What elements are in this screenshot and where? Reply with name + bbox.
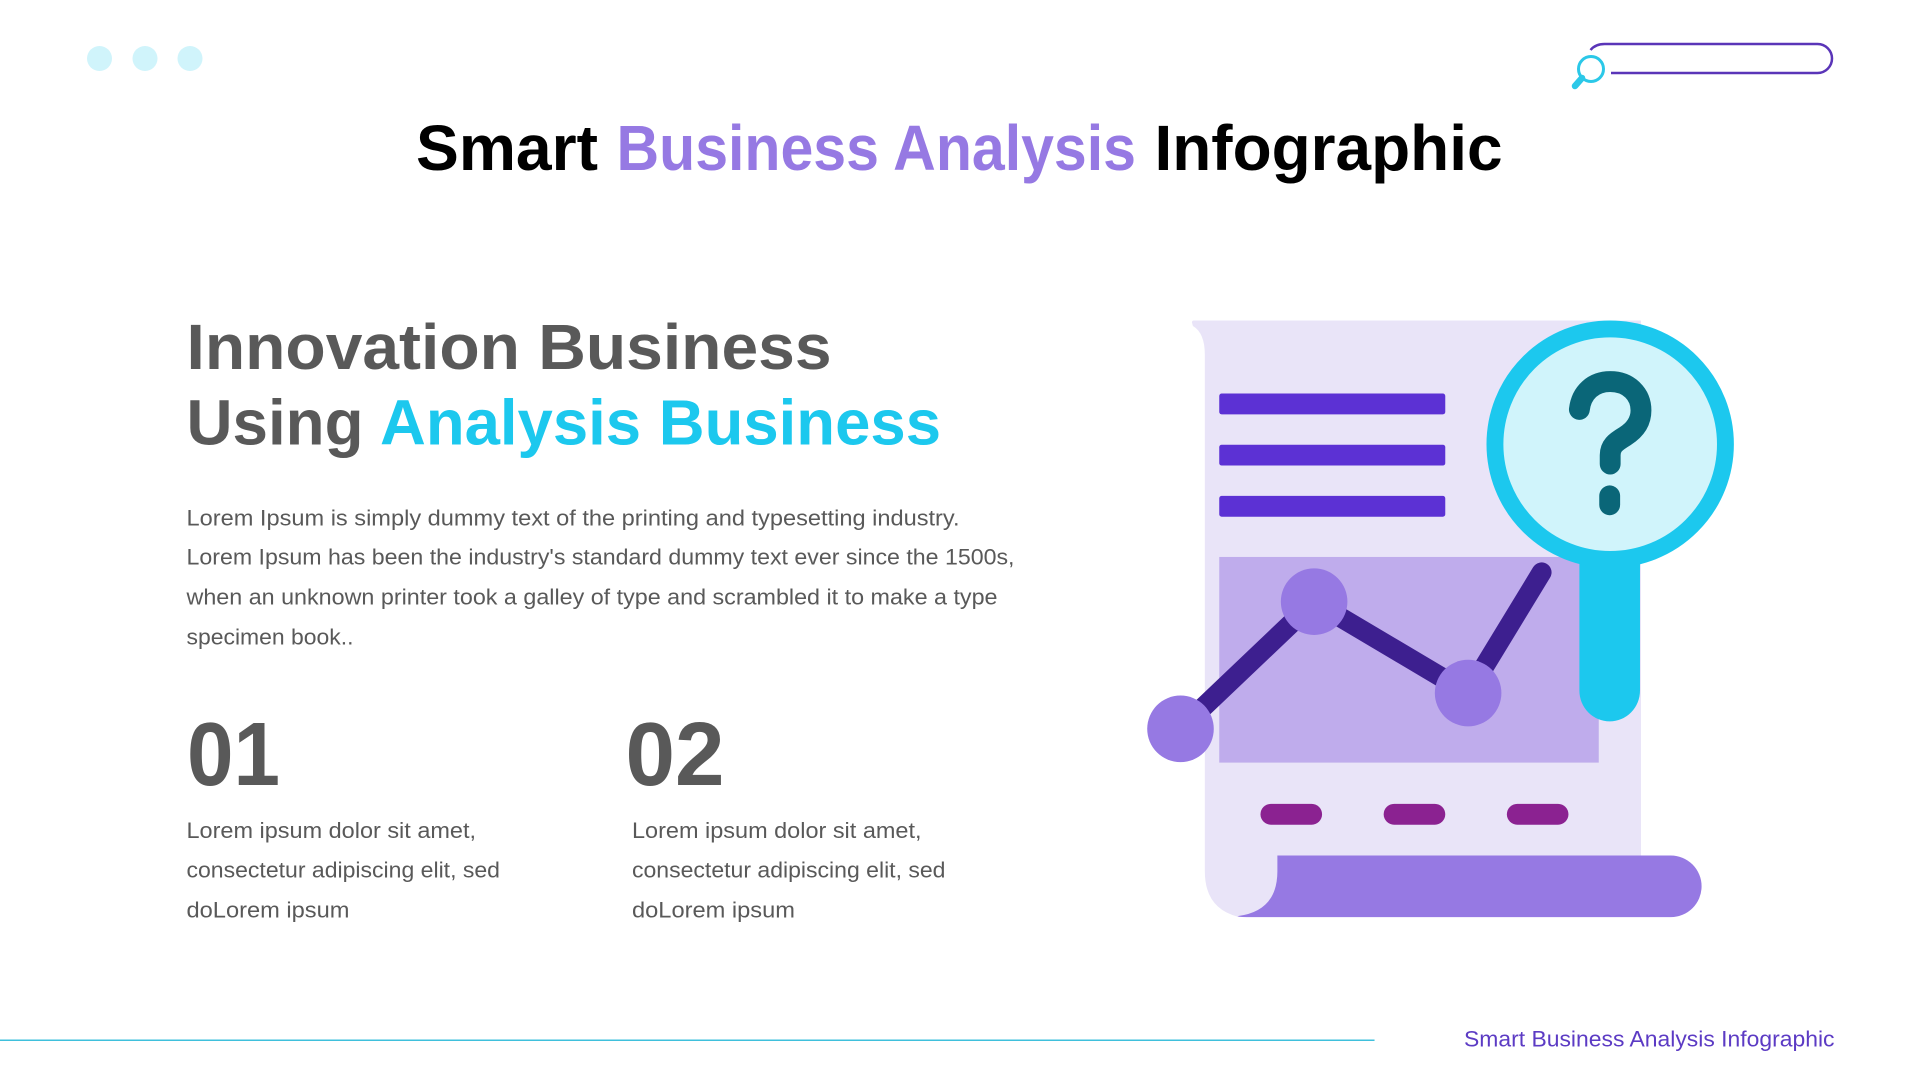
footer line xyxy=(0,1040,1375,1041)
chart background xyxy=(1219,557,1599,763)
item 01 text: consectetur adipiscing elit, sed xyxy=(186,858,500,882)
magnifier xyxy=(1495,329,1725,721)
item 01 text: Lorem ipsum dolor sit amet, xyxy=(186,818,476,843)
paragraph: Lorem Ipsum is simply dummy text of the printing and typesetting industry. xyxy=(186,506,960,530)
heading xyxy=(186,311,941,458)
scroll paper xyxy=(1192,320,1641,917)
item 02 text xyxy=(632,818,946,922)
item 01 text xyxy=(186,818,500,922)
heading: Innovation Business xyxy=(186,311,832,383)
title: Business Analysis xyxy=(616,112,1136,184)
item 02 text: consectetur adipiscing elit, sed xyxy=(632,858,946,882)
decorative three dots xyxy=(87,46,202,71)
number 01: 01 xyxy=(187,705,280,805)
title xyxy=(416,112,1502,184)
illustration: report with magnifier xyxy=(1147,320,1725,917)
title: Smart xyxy=(416,112,598,184)
text lines xyxy=(1219,394,1445,517)
scroll roll xyxy=(1238,855,1702,917)
paragraph: Lorem Ipsum has been the industry's standard dummy text ever since the 1500s, xyxy=(186,544,1014,570)
heading: Using xyxy=(186,386,364,458)
question mark xyxy=(1579,382,1641,505)
title: Infographic xyxy=(1154,112,1502,184)
item 02 text: doLorem ipsum xyxy=(632,898,795,922)
item 02 text: Lorem ipsum dolor sit amet, xyxy=(632,818,922,843)
item 02 xyxy=(626,705,946,922)
paragraph xyxy=(185,506,1014,650)
pills xyxy=(1260,804,1568,825)
paragraph: specimen book.. xyxy=(186,624,354,650)
item 01 xyxy=(186,705,500,922)
paragraph: when an unknown printer took a galley of type and scrambled it to make a type xyxy=(185,584,997,610)
line chart xyxy=(1147,568,1542,762)
magnifier lens xyxy=(1495,329,1725,559)
heading: Analysis Business xyxy=(380,386,941,458)
item 01 text: doLorem ipsum xyxy=(186,898,350,922)
icon: search bar xyxy=(1575,44,1832,86)
magnifier handle xyxy=(1579,539,1640,721)
number 02: 02 xyxy=(626,705,724,805)
footer text: Smart Business Analysis Infographic xyxy=(1464,1026,1834,1052)
